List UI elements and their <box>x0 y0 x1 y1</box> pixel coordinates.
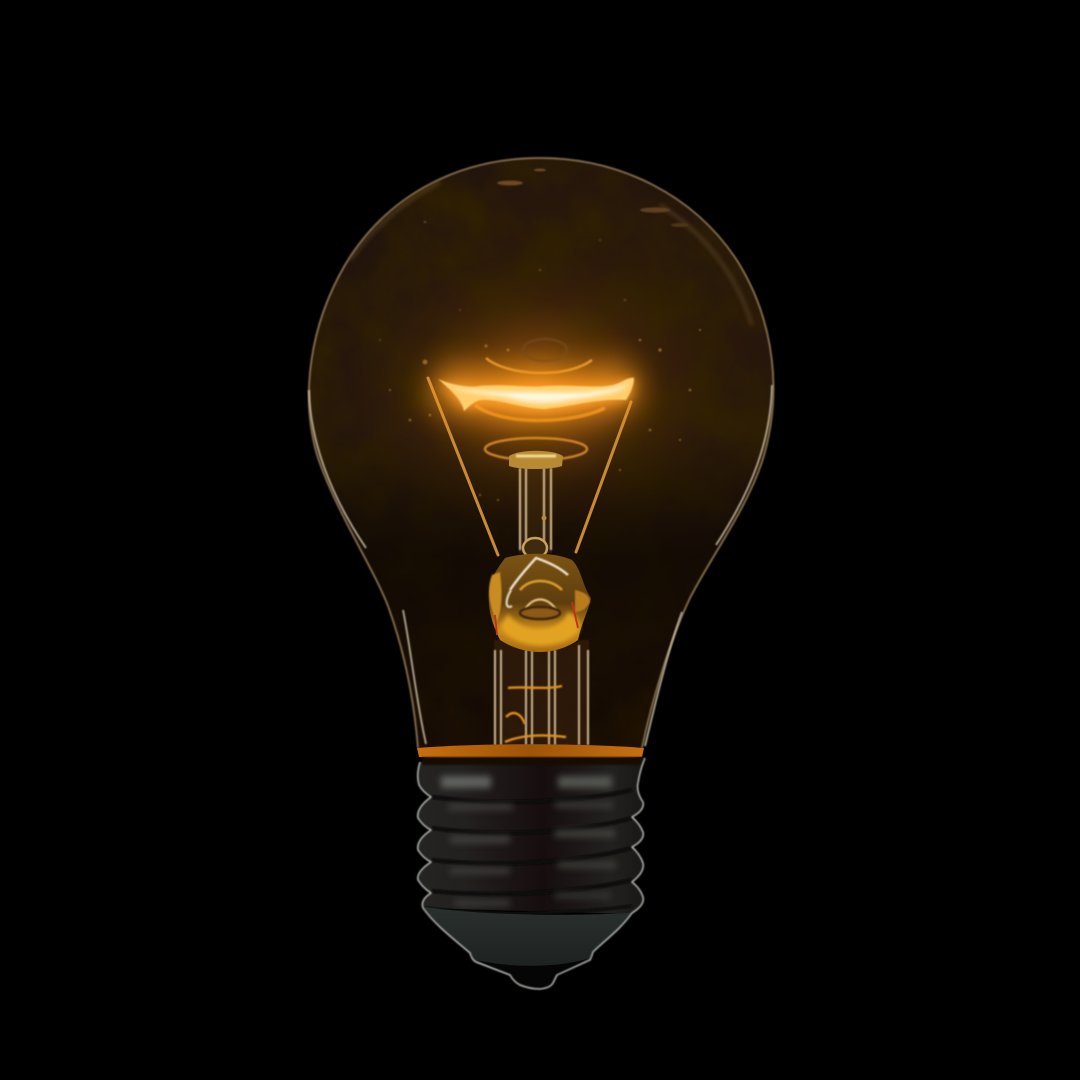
threaded body <box>418 758 645 914</box>
glass speckles <box>379 169 701 501</box>
upper glass reflections of filament <box>475 339 605 420</box>
glass bulb <box>300 150 780 760</box>
support wires <box>428 378 631 555</box>
stem lower glass tube <box>494 640 589 746</box>
glass inner reflection <box>309 385 772 746</box>
glass shoulder reflection <box>350 182 752 325</box>
orange collar <box>417 744 644 759</box>
stem pinch seal <box>489 554 591 652</box>
glass rim highlight <box>309 158 773 748</box>
glowing ring and stem cap <box>485 438 587 469</box>
tip shadow <box>476 958 590 989</box>
base edge highlight <box>418 758 645 989</box>
cone bottom <box>423 907 632 989</box>
illustration: glowing incandescent light bulb <box>306 156 776 991</box>
thread shading <box>422 761 644 913</box>
thread sheen <box>441 776 616 906</box>
filament <box>437 377 634 412</box>
screw base <box>418 758 645 989</box>
filament glow halo <box>350 257 720 527</box>
stem upper glass tube <box>519 468 552 558</box>
